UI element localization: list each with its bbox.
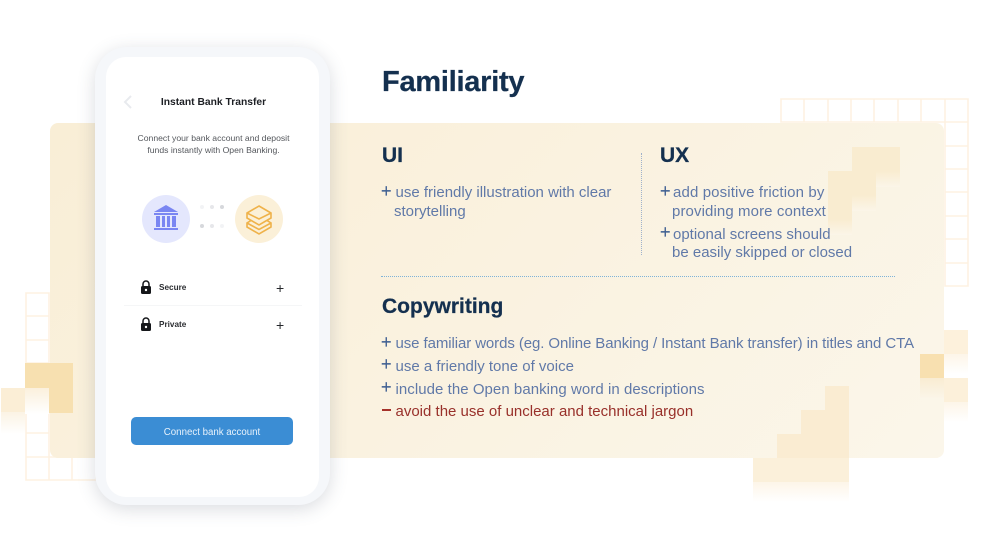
decorative blocks: upper steps — [828, 147, 900, 227]
icon: plus: + — [276, 280, 284, 296]
text: copy point 3: include the Open banking word in descriptions — [396, 381, 705, 398]
bullet: plus: + — [381, 332, 392, 352]
divider — [124, 305, 302, 306]
icon: plus: + — [276, 317, 284, 333]
decorative blocks: left gold — [25, 363, 73, 413]
text: UX point 1: add positive friction by — [673, 184, 825, 201]
title: Familiarity — [382, 66, 524, 98]
icon: lock — [141, 280, 151, 294]
grid: bottom left — [25, 292, 96, 481]
text: copy point 2: use a friendly tone of voice — [396, 358, 574, 375]
phone screen — [106, 57, 319, 497]
bullet: minus — [382, 409, 391, 411]
screen description: funds instantly with Open Banking. — [147, 145, 280, 155]
screen description: Connect your bank account and deposit — [138, 133, 290, 143]
heading: UX: UX — [660, 144, 689, 167]
screen description — [138, 133, 290, 155]
text: UX point 2: optional screens should — [673, 226, 831, 243]
grid: top right — [780, 98, 969, 287]
panel: background — [50, 123, 944, 458]
icon: bank — [142, 195, 190, 243]
text: copy point 4: avoid the use of unclear and technical jargon — [396, 403, 693, 420]
screen title: Instant Bank Transfer — [161, 97, 266, 108]
icon: connection dots — [200, 205, 224, 228]
heading: UI: UI — [382, 144, 403, 167]
divider: vertical dotted — [641, 153, 642, 255]
icon: lock — [141, 317, 151, 331]
phone mockup — [95, 47, 330, 505]
section: UI: storytelling — [394, 203, 466, 220]
divider: horizontal dotted — [381, 276, 895, 277]
row: secure — [141, 280, 284, 296]
bullet: plus: + — [660, 222, 671, 242]
text: UI point: use friendly illustration with clear — [396, 184, 611, 201]
section: UX — [660, 144, 852, 261]
heading: copywriting: Copywriting — [382, 295, 503, 318]
text: copy point 1: use familiar words (eg. Online Banking / Instant Bank transfer) in titles and CTA — [396, 335, 914, 352]
icon: back chevron — [124, 96, 132, 108]
section: UX: providing more context — [672, 203, 826, 220]
row: private — [141, 317, 284, 333]
section: UX: be easily skipped or closed — [672, 244, 852, 261]
bullet: plus: + — [381, 377, 392, 397]
bullet: plus: + — [381, 354, 392, 374]
section: UI — [381, 144, 612, 220]
bullet: plus: + — [381, 181, 392, 201]
button: connect bank account — [131, 417, 293, 445]
button: connect bank account: Connect bank account — [164, 427, 260, 438]
decorative blocks: lower steps — [753, 386, 849, 495]
decorative blocks: right — [920, 330, 968, 415]
label: private: Private — [159, 320, 186, 329]
icon: layers — [235, 195, 283, 243]
label: secure: Secure — [159, 283, 186, 292]
decorative blocks: left — [1, 388, 25, 412]
bullet: plus: + — [660, 181, 671, 201]
section: copywriting — [381, 295, 914, 420]
